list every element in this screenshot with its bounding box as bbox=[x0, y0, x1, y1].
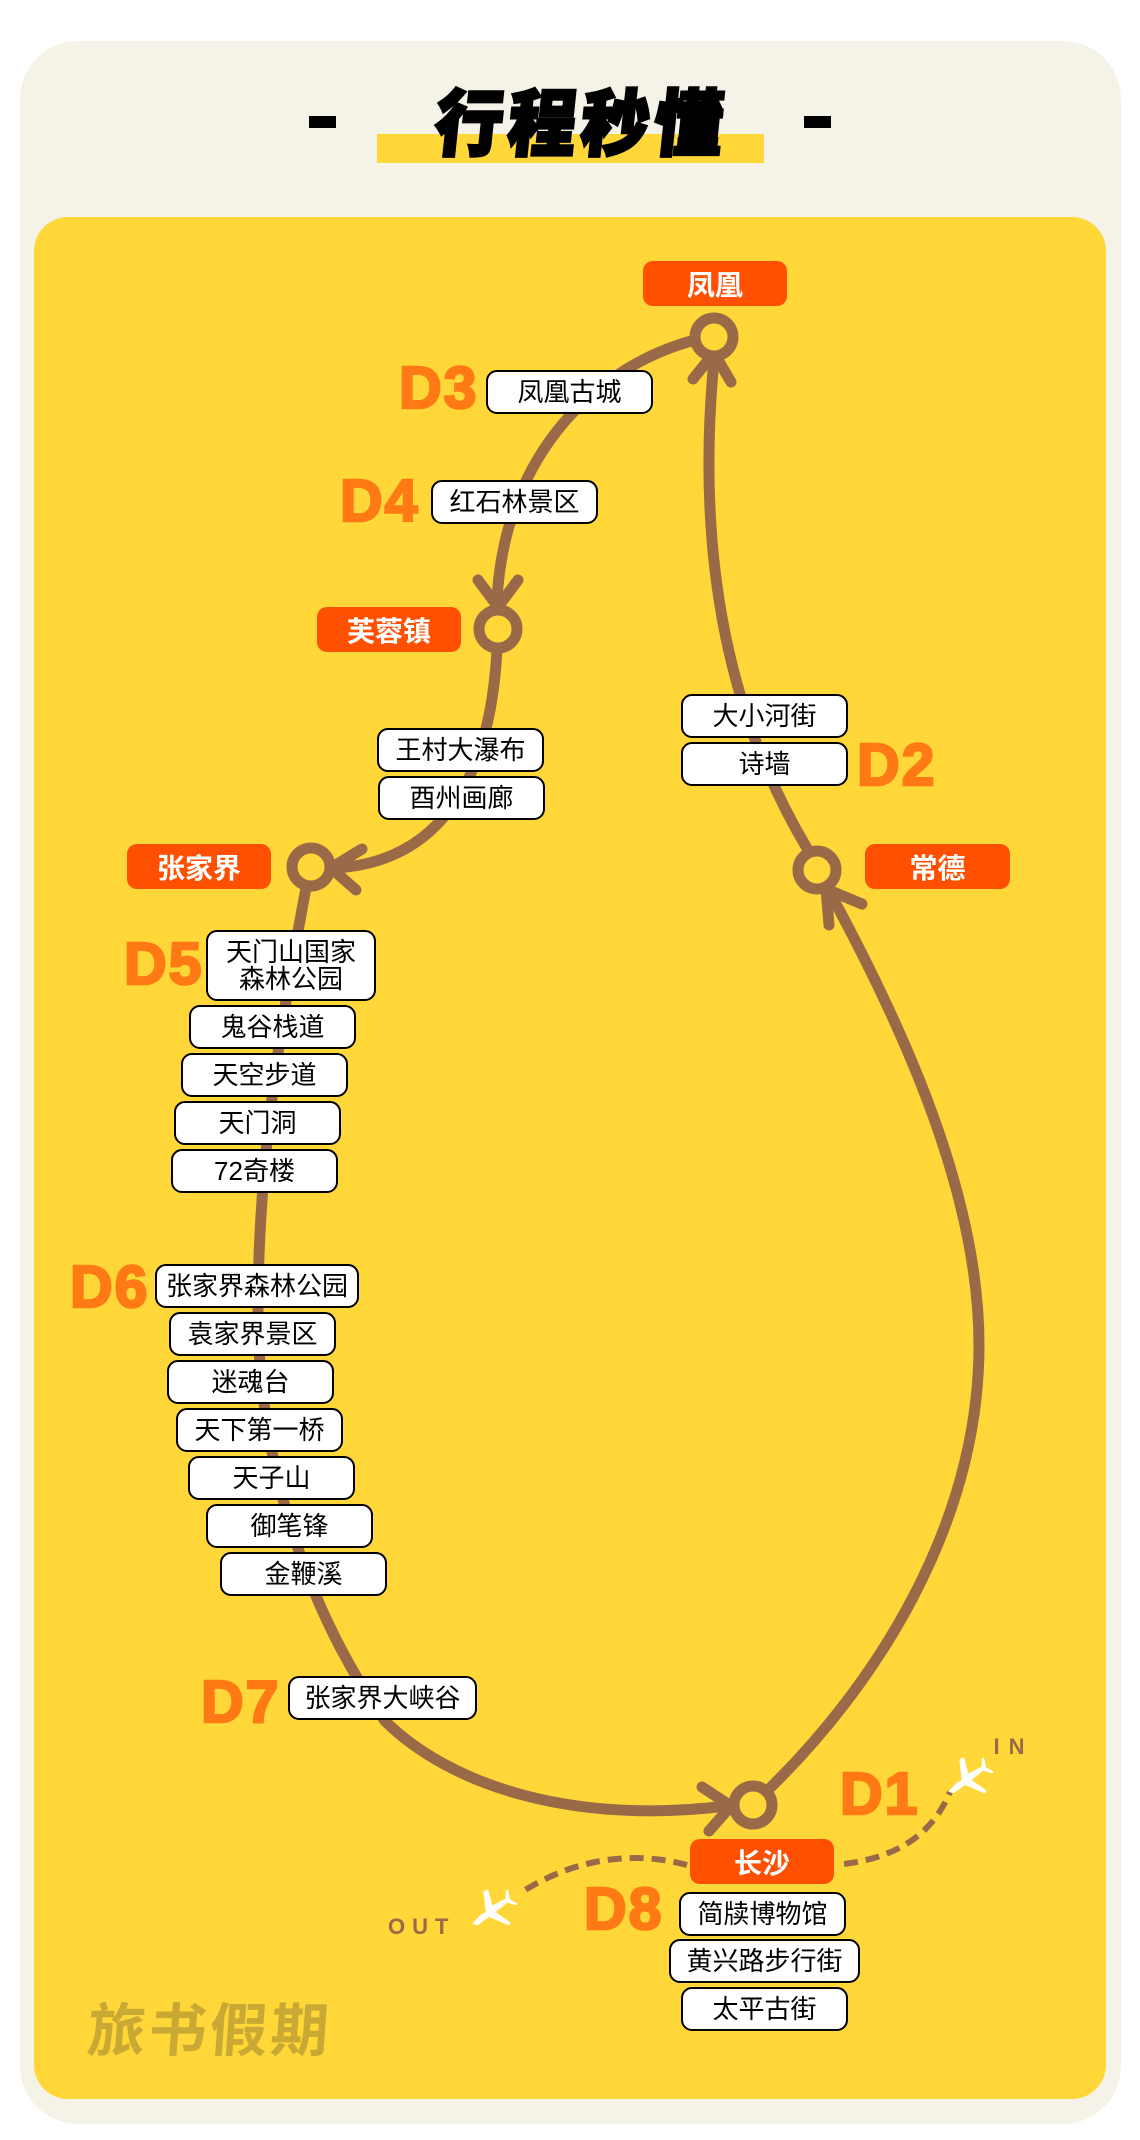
city label: Zhangjiajie bbox=[127, 844, 271, 889]
stop: 凤凰古城: 凤凰古城 bbox=[517, 376, 622, 406]
stop: 太平古街 bbox=[681, 1987, 848, 2031]
title highlight bar bbox=[377, 134, 764, 163]
stop: 张家界森林公园 bbox=[155, 1264, 359, 1308]
stop: 天门山国家森林公园: 天门山国家 bbox=[226, 936, 356, 966]
city label: Furong: 芙蓉镇 bbox=[347, 616, 431, 646]
stop: 天子山: 天子山 bbox=[232, 1462, 310, 1492]
stop: 张家界森林公园: 张家界森林公园 bbox=[166, 1270, 348, 1300]
stop: 72奇楼: 72奇楼 bbox=[214, 1156, 295, 1186]
stop: 黄兴路步行街 bbox=[669, 1939, 860, 1983]
stop: 张家界大峡谷 bbox=[288, 1676, 477, 1720]
stop: 诗墙 bbox=[681, 742, 848, 786]
stop: 袁家界景区: 袁家界景区 bbox=[187, 1318, 318, 1348]
stop: 鬼谷栈道 bbox=[189, 1005, 356, 1049]
stop: 红石林景区 bbox=[431, 480, 598, 524]
stop: 王村大瀑布 bbox=[377, 728, 544, 772]
stop: 迷魂台: 迷魂台 bbox=[211, 1366, 290, 1396]
city label: Changsha bbox=[690, 1839, 834, 1884]
stop: 天空步道 bbox=[181, 1053, 348, 1097]
route: Changsha to Changde bbox=[771, 889, 979, 1787]
node: Changsha bbox=[734, 1786, 772, 1824]
stop: 大小河街: 大小河街 bbox=[712, 700, 816, 730]
route: Furong to Zhangjiajie bbox=[331, 650, 497, 890]
title dash right bbox=[804, 116, 831, 128]
stop: 天门山国家森林公园: 森林公园 bbox=[239, 964, 343, 994]
stop: 金鞭溪 bbox=[220, 1552, 387, 1596]
stop: 御笔锋 bbox=[206, 1504, 373, 1548]
day label D7: D7 bbox=[201, 1669, 280, 1735]
stop: 72奇楼 bbox=[171, 1149, 338, 1193]
stop: 大小河街 bbox=[681, 694, 848, 738]
day label D1: D1 bbox=[840, 1761, 919, 1827]
day label D8: D8 bbox=[584, 1876, 663, 1942]
stop: 简牍博物馆: 简牍博物馆 bbox=[697, 1898, 828, 1928]
city label: Fenghuang: 凤凰 bbox=[687, 270, 743, 300]
stop: 红石林景区: 红石林景区 bbox=[449, 486, 580, 516]
brand watermark: 旅书假期 bbox=[85, 1984, 335, 2068]
day label D5: D5 bbox=[124, 931, 203, 997]
stop: 迷魂台 bbox=[167, 1360, 334, 1404]
day label D6: D6 bbox=[70, 1254, 149, 1320]
node: Fenghuang bbox=[695, 318, 733, 356]
stop: 诗墙: 诗墙 bbox=[738, 748, 790, 778]
stop: 王村大瀑布: 王村大瀑布 bbox=[395, 734, 526, 764]
day label D2: D2 bbox=[857, 732, 936, 798]
stop: 天门洞 bbox=[174, 1101, 341, 1145]
stop: 天下第一桥: 天下第一桥 bbox=[194, 1414, 324, 1444]
day label D4: D4 bbox=[340, 468, 419, 534]
stop: 酉州画廊: 酉州画廊 bbox=[409, 782, 514, 812]
node: Zhangjiajie bbox=[292, 848, 330, 886]
icon: plane in bbox=[948, 1757, 993, 1793]
stop: 天门山国家森林公园 bbox=[206, 930, 376, 1001]
OUT label: OUT bbox=[388, 1914, 455, 1939]
stop: 太平古街: 太平古街 bbox=[712, 1994, 816, 2024]
route: Fenghuang to Furong bbox=[478, 340, 695, 607]
route: Zhangjiajie to Changsha bbox=[258, 888, 731, 1831]
stop: 黄兴路步行街: 黄兴路步行街 bbox=[686, 1946, 842, 1976]
stop: 天下第一桥 bbox=[176, 1408, 343, 1452]
city label: Changde bbox=[865, 844, 1010, 889]
stop: 张家界大峡谷: 张家界大峡谷 bbox=[304, 1682, 460, 1712]
city label: Furong bbox=[317, 607, 461, 652]
stop: 金鞭溪: 金鞭溪 bbox=[264, 1558, 342, 1588]
stop: 袁家界景区 bbox=[169, 1312, 336, 1356]
city label: Changde: 常德 bbox=[909, 852, 966, 884]
city label: Fenghuang bbox=[643, 261, 787, 306]
flight in dashed line bbox=[844, 1792, 950, 1864]
node: Furong bbox=[479, 610, 517, 648]
title dash left bbox=[309, 116, 336, 128]
IN label: IN bbox=[994, 1734, 1034, 1759]
stop: 天门洞: 天门洞 bbox=[218, 1108, 296, 1138]
city label: Changsha: 长沙 bbox=[734, 1848, 790, 1878]
stop: 鬼谷栈道: 鬼谷栈道 bbox=[220, 1012, 324, 1042]
stop: 简牍博物馆 bbox=[679, 1892, 846, 1936]
title: 行程秒懂 bbox=[431, 66, 734, 171]
flight out dashed line bbox=[522, 1858, 687, 1892]
stop: 御笔锋: 御笔锋 bbox=[250, 1510, 328, 1540]
route: Changde to Fenghuang bbox=[693, 353, 808, 850]
node: Changde bbox=[798, 851, 836, 889]
icon: plane out bbox=[472, 1889, 517, 1925]
stop: 天子山 bbox=[188, 1456, 355, 1500]
stop: 天空步道: 天空步道 bbox=[212, 1060, 316, 1090]
city label: Zhangjiajie: 张家界 bbox=[157, 852, 241, 884]
day label D3: D3 bbox=[399, 355, 478, 421]
stop: 酉州画廊 bbox=[378, 776, 545, 820]
stop: 凤凰古城 bbox=[486, 370, 653, 414]
